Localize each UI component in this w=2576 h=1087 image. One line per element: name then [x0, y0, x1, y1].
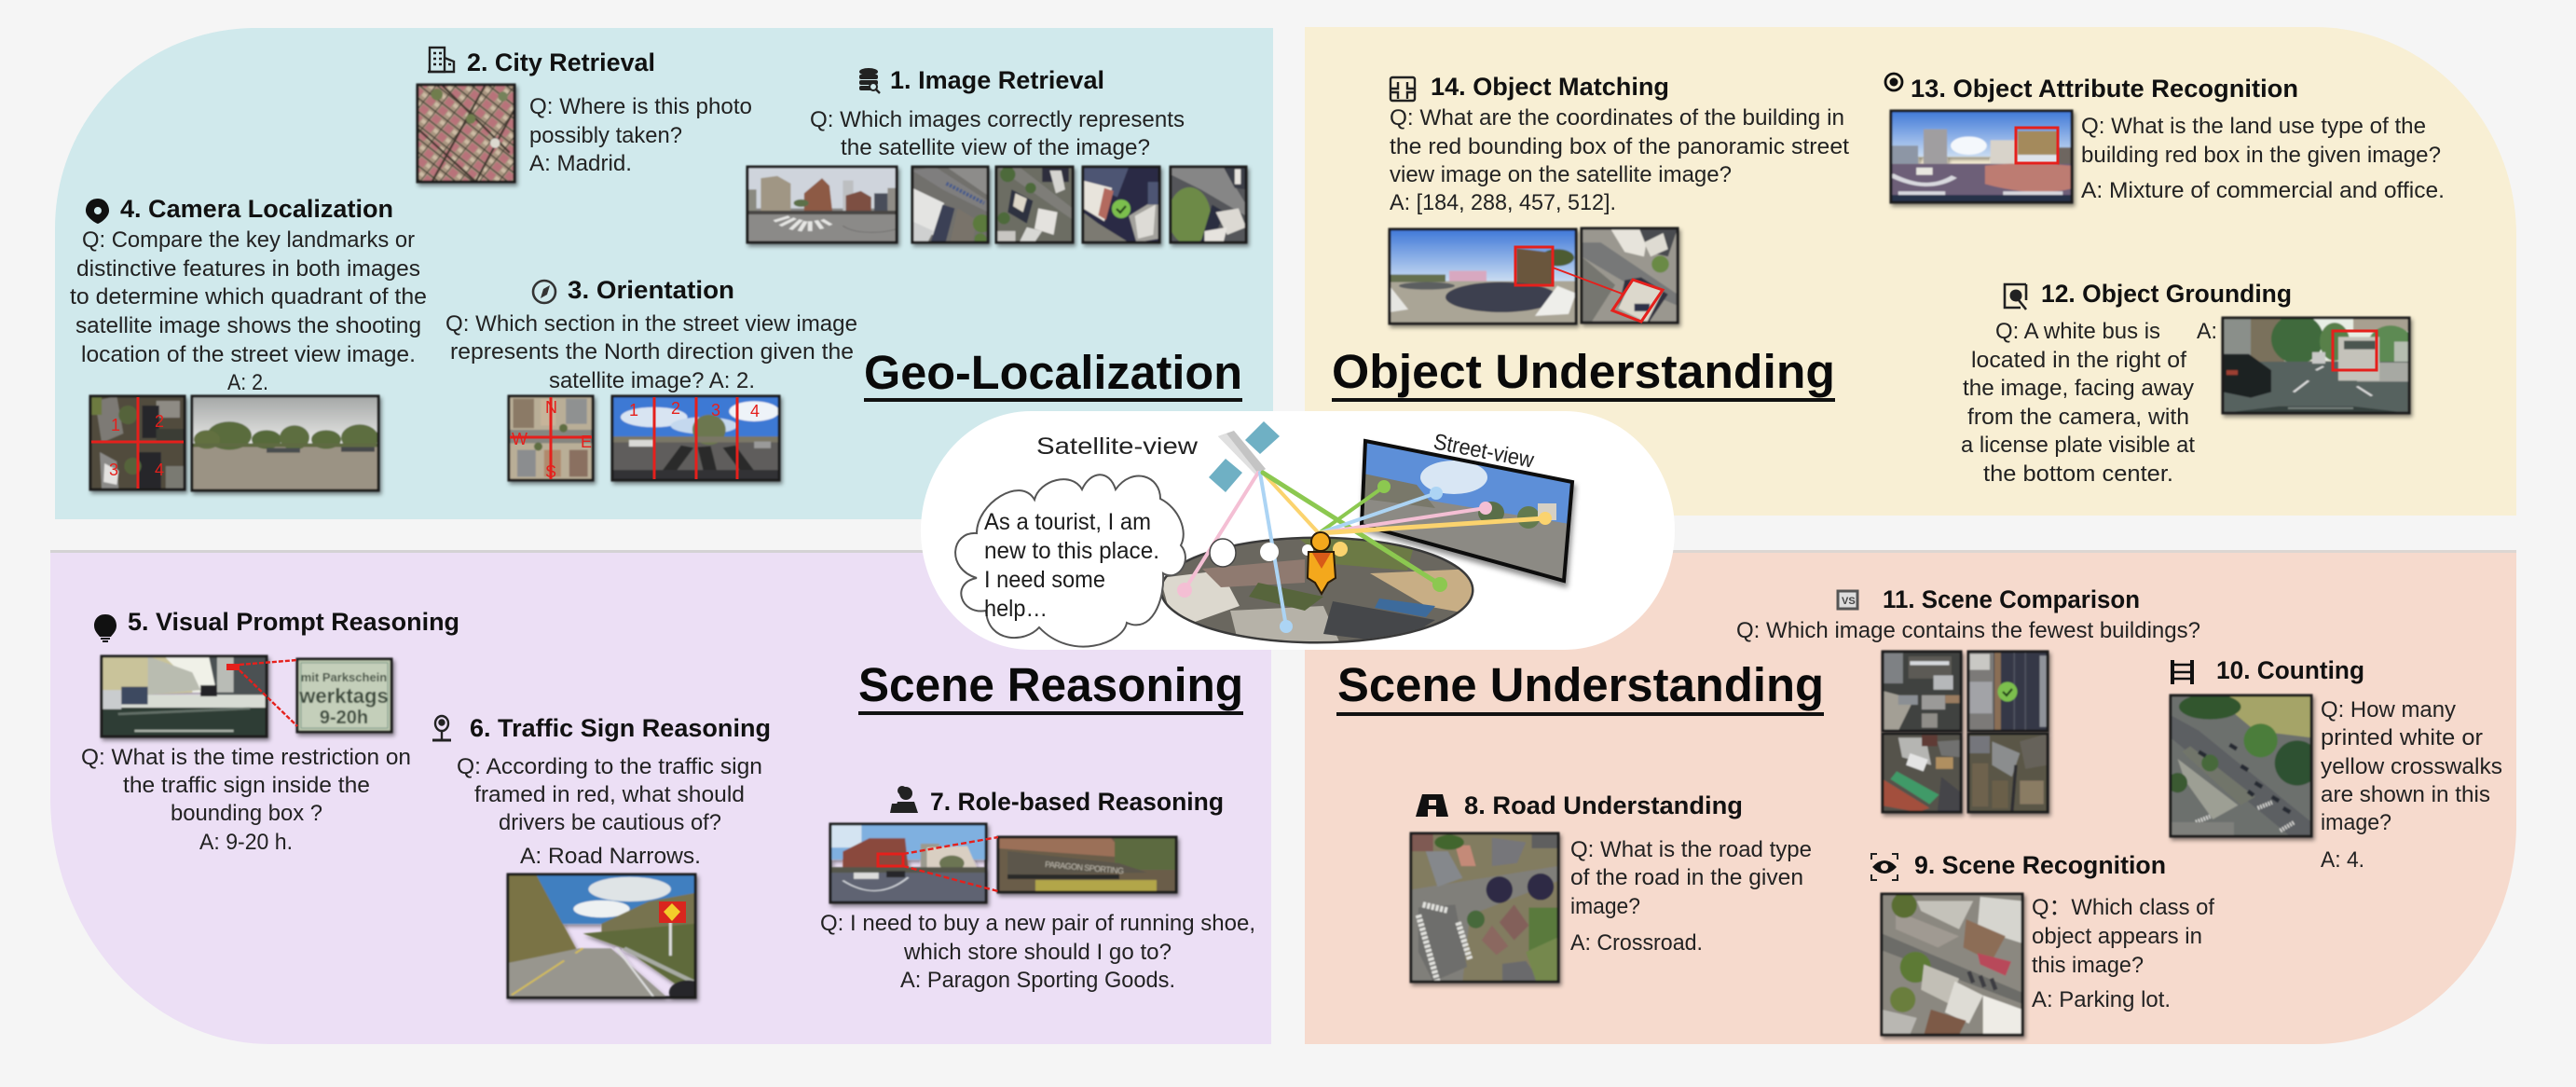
heading: 11. Scene Comparison: 11. Scene Comparison	[1883, 585, 2140, 613]
icon: grounding magnifier	[2005, 284, 2026, 310]
task 2: City Retrieval	[418, 48, 752, 182]
question text: A: 2.	[227, 370, 268, 395]
question text: A: Paragon Sporting Goods.	[900, 968, 1175, 993]
question text: A: [184, 288, 457, 512].	[1390, 190, 1616, 215]
image: sign close-up: 9-20h	[320, 708, 368, 728]
question text: located in the right of	[1971, 348, 2186, 373]
task 7: Role-based Reasoning	[820, 786, 1255, 993]
traffic sign marker	[659, 901, 686, 923]
question text: A: Parking lot.	[2032, 987, 2171, 1012]
icon: database search	[859, 68, 880, 93]
icon: city building	[428, 48, 454, 72]
question text: the image, facing away	[1963, 376, 2194, 401]
icon: satellite	[1209, 421, 1280, 492]
matching red markers	[1515, 247, 1663, 322]
image: satellite option B	[996, 167, 1073, 242]
small thought bubble	[1210, 539, 1236, 567]
icon: target	[1885, 74, 1902, 90]
icon: abacus	[2172, 660, 2192, 684]
question text: the red bounding box of the panoramic street	[1390, 134, 1849, 159]
image: store panorama	[830, 824, 986, 902]
question text: bounding box ?	[171, 801, 322, 826]
task 12: Object Grounding	[1961, 280, 2413, 487]
quadrant markers	[91, 397, 184, 488]
thought bubble text: help…	[984, 596, 1048, 622]
task 5: Visual Prompt Reasoning	[81, 608, 459, 855]
question text: view image on the satellite image?	[1390, 162, 1732, 187]
image: store front close-up: PARAGON SPORTING	[1045, 860, 1124, 875]
ground disc aerial	[1160, 536, 1477, 648]
question text	[820, 911, 1255, 993]
image: city aerial	[418, 85, 514, 182]
thought bubble text	[984, 509, 1159, 622]
image: satellite option C with check	[1083, 167, 1159, 242]
question text: building red box in the given image?	[2081, 143, 2441, 168]
image: mountain road	[508, 874, 706, 1005]
image: sign close-up	[297, 659, 391, 732]
question text: Q: What is the road type	[1570, 837, 1812, 862]
heading: 5. Visual Prompt Reasoning: 5. Visual Prompt Reasoning	[128, 608, 459, 636]
image: street panorama	[747, 167, 897, 242]
heading: 14. Object Matching: 14. Object Matching	[1431, 73, 1669, 101]
image: satellite option D	[1169, 167, 1246, 244]
icon: location pin	[86, 199, 109, 224]
question text: satellite image shows the shooting	[75, 313, 421, 338]
question text: Q: Which image contains the fewest buildings?	[1736, 618, 2200, 643]
icon: green check	[1112, 200, 1130, 218]
image: road aerial	[1411, 833, 1558, 982]
heading: 9. Scene Recognition: 9. Scene Recognition	[1914, 851, 2166, 879]
panel: Scene Reasoning background	[50, 553, 1271, 1044]
image: compass satellite	[509, 396, 593, 480]
image: comparison 1	[1883, 652, 1961, 731]
icon: light bulb	[94, 614, 116, 642]
sight lines	[1185, 473, 1545, 626]
task 13: Object Attribute Recognition	[1885, 74, 2445, 203]
image: comparison 4	[1968, 734, 2048, 812]
heading: 13. Object Attribute Recognition: 13. Object Attribute Recognition	[1911, 75, 2298, 103]
icon: road	[1416, 794, 1448, 817]
icon: green check	[1998, 682, 2017, 701]
question text: satellite image? A: 2.	[549, 368, 755, 393]
image: quadrant satellite	[90, 396, 185, 489]
question text: A: Mixture of commercial and office.	[2081, 178, 2445, 203]
icon: pegman	[1308, 532, 1336, 594]
image: street with white bus	[2223, 314, 2413, 413]
question text: image?	[2321, 810, 2391, 835]
heading: 6. Traffic Sign Reasoning: 6. Traffic Sign Reasoning	[470, 714, 771, 742]
image: parking lot aerial	[1882, 892, 2022, 1035]
question text: this image?	[2032, 953, 2144, 978]
thought bubble text: new to this place.	[984, 538, 1159, 564]
icon: people	[890, 786, 918, 813]
question text: the bottom center.	[1983, 461, 2173, 487]
question text: A: Madrid.	[529, 151, 632, 176]
quadrant markers: 2	[155, 412, 164, 431]
task 8: Road Understanding	[1411, 791, 1812, 982]
question text: distinctive features in both images	[76, 256, 420, 282]
question text: Q: Which section in the street view image	[445, 311, 857, 337]
heading: 2. City Retrieval: 2. City Retrieval	[467, 48, 655, 76]
question text: location of the street view image.	[81, 342, 416, 367]
red dashed connector	[878, 837, 998, 891]
task 4: Camera Localization	[70, 195, 427, 490]
red dashed connector	[226, 660, 297, 726]
question text: Q: Compare the key landmarks or	[82, 227, 415, 253]
image: store front close-up	[998, 837, 1176, 892]
question text: a license plate visible at	[1961, 433, 2195, 458]
street-view panel	[1362, 441, 1572, 581]
image: sign close-up: mit Parkschein	[301, 670, 387, 684]
image: parking lot panorama	[192, 396, 378, 490]
panel: Object Understanding background	[1305, 27, 2516, 516]
heading: 12. Object Grounding: 12. Object Grounding	[2041, 280, 2292, 308]
question text: drivers be cautious of?	[499, 810, 721, 835]
heading: 3. Orientation: 3. Orientation	[568, 276, 734, 304]
question text	[457, 754, 762, 869]
quadrant markers: 1	[111, 416, 120, 434]
question text: A: Crossroad.	[1570, 930, 1703, 956]
sight line endpoints	[1177, 480, 1552, 633]
question text	[2032, 895, 2214, 1012]
heading: 7. Role-based Reasoning: 7. Role-based Reasoning	[930, 788, 1224, 816]
question text: possibly taken?	[529, 123, 682, 148]
question text: are shown in this	[2321, 782, 2490, 807]
heading: 1. Image Retrieval: 1. Image Retrieval	[890, 66, 1104, 94]
icon: VS box: VS	[1842, 596, 1856, 607]
thought bubble cloud	[955, 475, 1185, 647]
question text: image?	[1570, 894, 1640, 919]
question text: Q: According to the traffic sign	[457, 754, 762, 779]
central scene: tourist, satellite and street view	[921, 411, 1675, 650]
section lines and numbers	[629, 397, 760, 479]
quadrant markers: 4	[155, 461, 164, 479]
question text: Q: What is the land use type of the	[2081, 114, 2426, 139]
heading: Object Understanding: Object Understanding	[1332, 345, 1835, 398]
panel: white pill	[921, 411, 1675, 650]
task 14: Object Matching	[1390, 73, 1849, 323]
icon: compass	[533, 281, 555, 303]
panel: Scene Understanding background	[1305, 553, 2516, 1044]
red box	[2016, 128, 2058, 163]
compass markers	[510, 397, 592, 481]
question text: Q：Which class of	[2032, 895, 2214, 920]
compass markers: E	[581, 433, 592, 451]
icon: eye in frame	[1871, 854, 1898, 880]
image: attribute panorama	[1891, 111, 2072, 202]
task 11: Scene Comparison	[1736, 585, 2200, 812]
question text: A:	[2197, 319, 2217, 344]
question text: represents the North direction given the	[450, 339, 854, 365]
question text: A: 9-20 h.	[199, 830, 293, 855]
thought bubble text: I need some	[984, 567, 1105, 593]
heading: 4. Camera Localization: 4. Camera Localization	[120, 195, 393, 223]
question text: framed in red, what should	[474, 782, 745, 807]
question text: Q: How many	[2321, 697, 2456, 722]
question text: printed white or	[2321, 725, 2483, 750]
section lines and numbers: 4	[750, 402, 760, 420]
section lines and numbers: 2	[671, 399, 680, 418]
question text: to determine which quadrant of the	[70, 284, 427, 310]
image: sectioned panorama	[612, 396, 779, 480]
task 10: Counting	[2168, 656, 2502, 873]
question text: which store should I go to?	[903, 940, 1172, 965]
icon: map pin stand	[432, 716, 451, 740]
question text: object appears in	[2032, 924, 2202, 949]
compass markers: W	[512, 430, 528, 448]
question text: Q: I need to buy a new pair of running shoe,	[820, 911, 1255, 936]
image: comparison 3	[1883, 734, 1961, 812]
question text: Q: Which images correctly represents	[810, 107, 1185, 132]
question text: yellow crosswalks	[2321, 754, 2502, 779]
question text: Q: What are the coordinates of the building in	[1390, 105, 1844, 131]
question text	[1570, 837, 1812, 956]
question text: Q: What is the time restriction on	[81, 745, 411, 770]
section lines and numbers: 1	[629, 401, 638, 420]
question text: A: 4.	[2321, 847, 2364, 873]
question text	[1390, 105, 1849, 215]
red box	[2333, 331, 2377, 370]
panel: Geo-Localization background	[55, 28, 1273, 519]
heading: Scene Reasoning: Scene Reasoning	[858, 658, 1243, 711]
image: satellite option A	[912, 167, 991, 245]
thought bubble text: As a tourist, I am	[984, 509, 1151, 535]
question text: A: Road Narrows.	[520, 844, 701, 869]
image: comparison 2 with check	[1968, 652, 2048, 731]
question text	[529, 94, 752, 176]
question text: of the road in the given	[1570, 865, 1803, 890]
image: matching satellite	[1582, 228, 1678, 323]
question text	[81, 745, 411, 855]
compass markers: S	[545, 462, 556, 481]
image: crosswalk aerial	[2168, 694, 2320, 836]
question text: Q: A white bus is	[1995, 319, 2160, 344]
icon: object matching	[1391, 77, 1415, 101]
question text: the traffic sign inside the	[123, 773, 370, 798]
task 6: Traffic Sign Reasoning	[432, 714, 771, 1005]
heading: 8. Road Understanding: 8. Road Understanding	[1464, 791, 1743, 819]
task 9: Scene Recognition	[1871, 851, 2214, 1035]
icon: VS box	[1838, 591, 1857, 609]
label: Satellite-view: Satellite-view	[1036, 433, 1199, 460]
question text: the satellite view of the image?	[841, 135, 1150, 160]
question text	[2321, 697, 2502, 873]
section lines and numbers: 3	[711, 401, 720, 420]
heading: Scene Understanding: Scene Understanding	[1337, 658, 1824, 711]
question text	[2081, 114, 2445, 203]
task 1: Image Retrieval	[747, 66, 1246, 245]
image: matching panorama	[1390, 229, 1576, 323]
image: street with sign	[102, 656, 267, 736]
question text	[810, 107, 1185, 160]
question text	[1961, 319, 2217, 487]
compass markers: N	[545, 398, 557, 417]
heading: Geo-Localization: Geo-Localization	[864, 346, 1242, 399]
question text	[445, 311, 857, 393]
question text: Q: Where is this photo	[529, 94, 752, 119]
label: Street-view: Street-view	[1432, 429, 1537, 474]
question text: from the camera, with	[1967, 405, 2189, 430]
task 3: Orientation	[445, 276, 857, 481]
image: sign close-up: werktags	[298, 684, 389, 708]
heading: 10. Counting: 10. Counting	[2216, 656, 2364, 684]
question text	[70, 227, 427, 395]
quadrant markers: 3	[109, 461, 118, 479]
